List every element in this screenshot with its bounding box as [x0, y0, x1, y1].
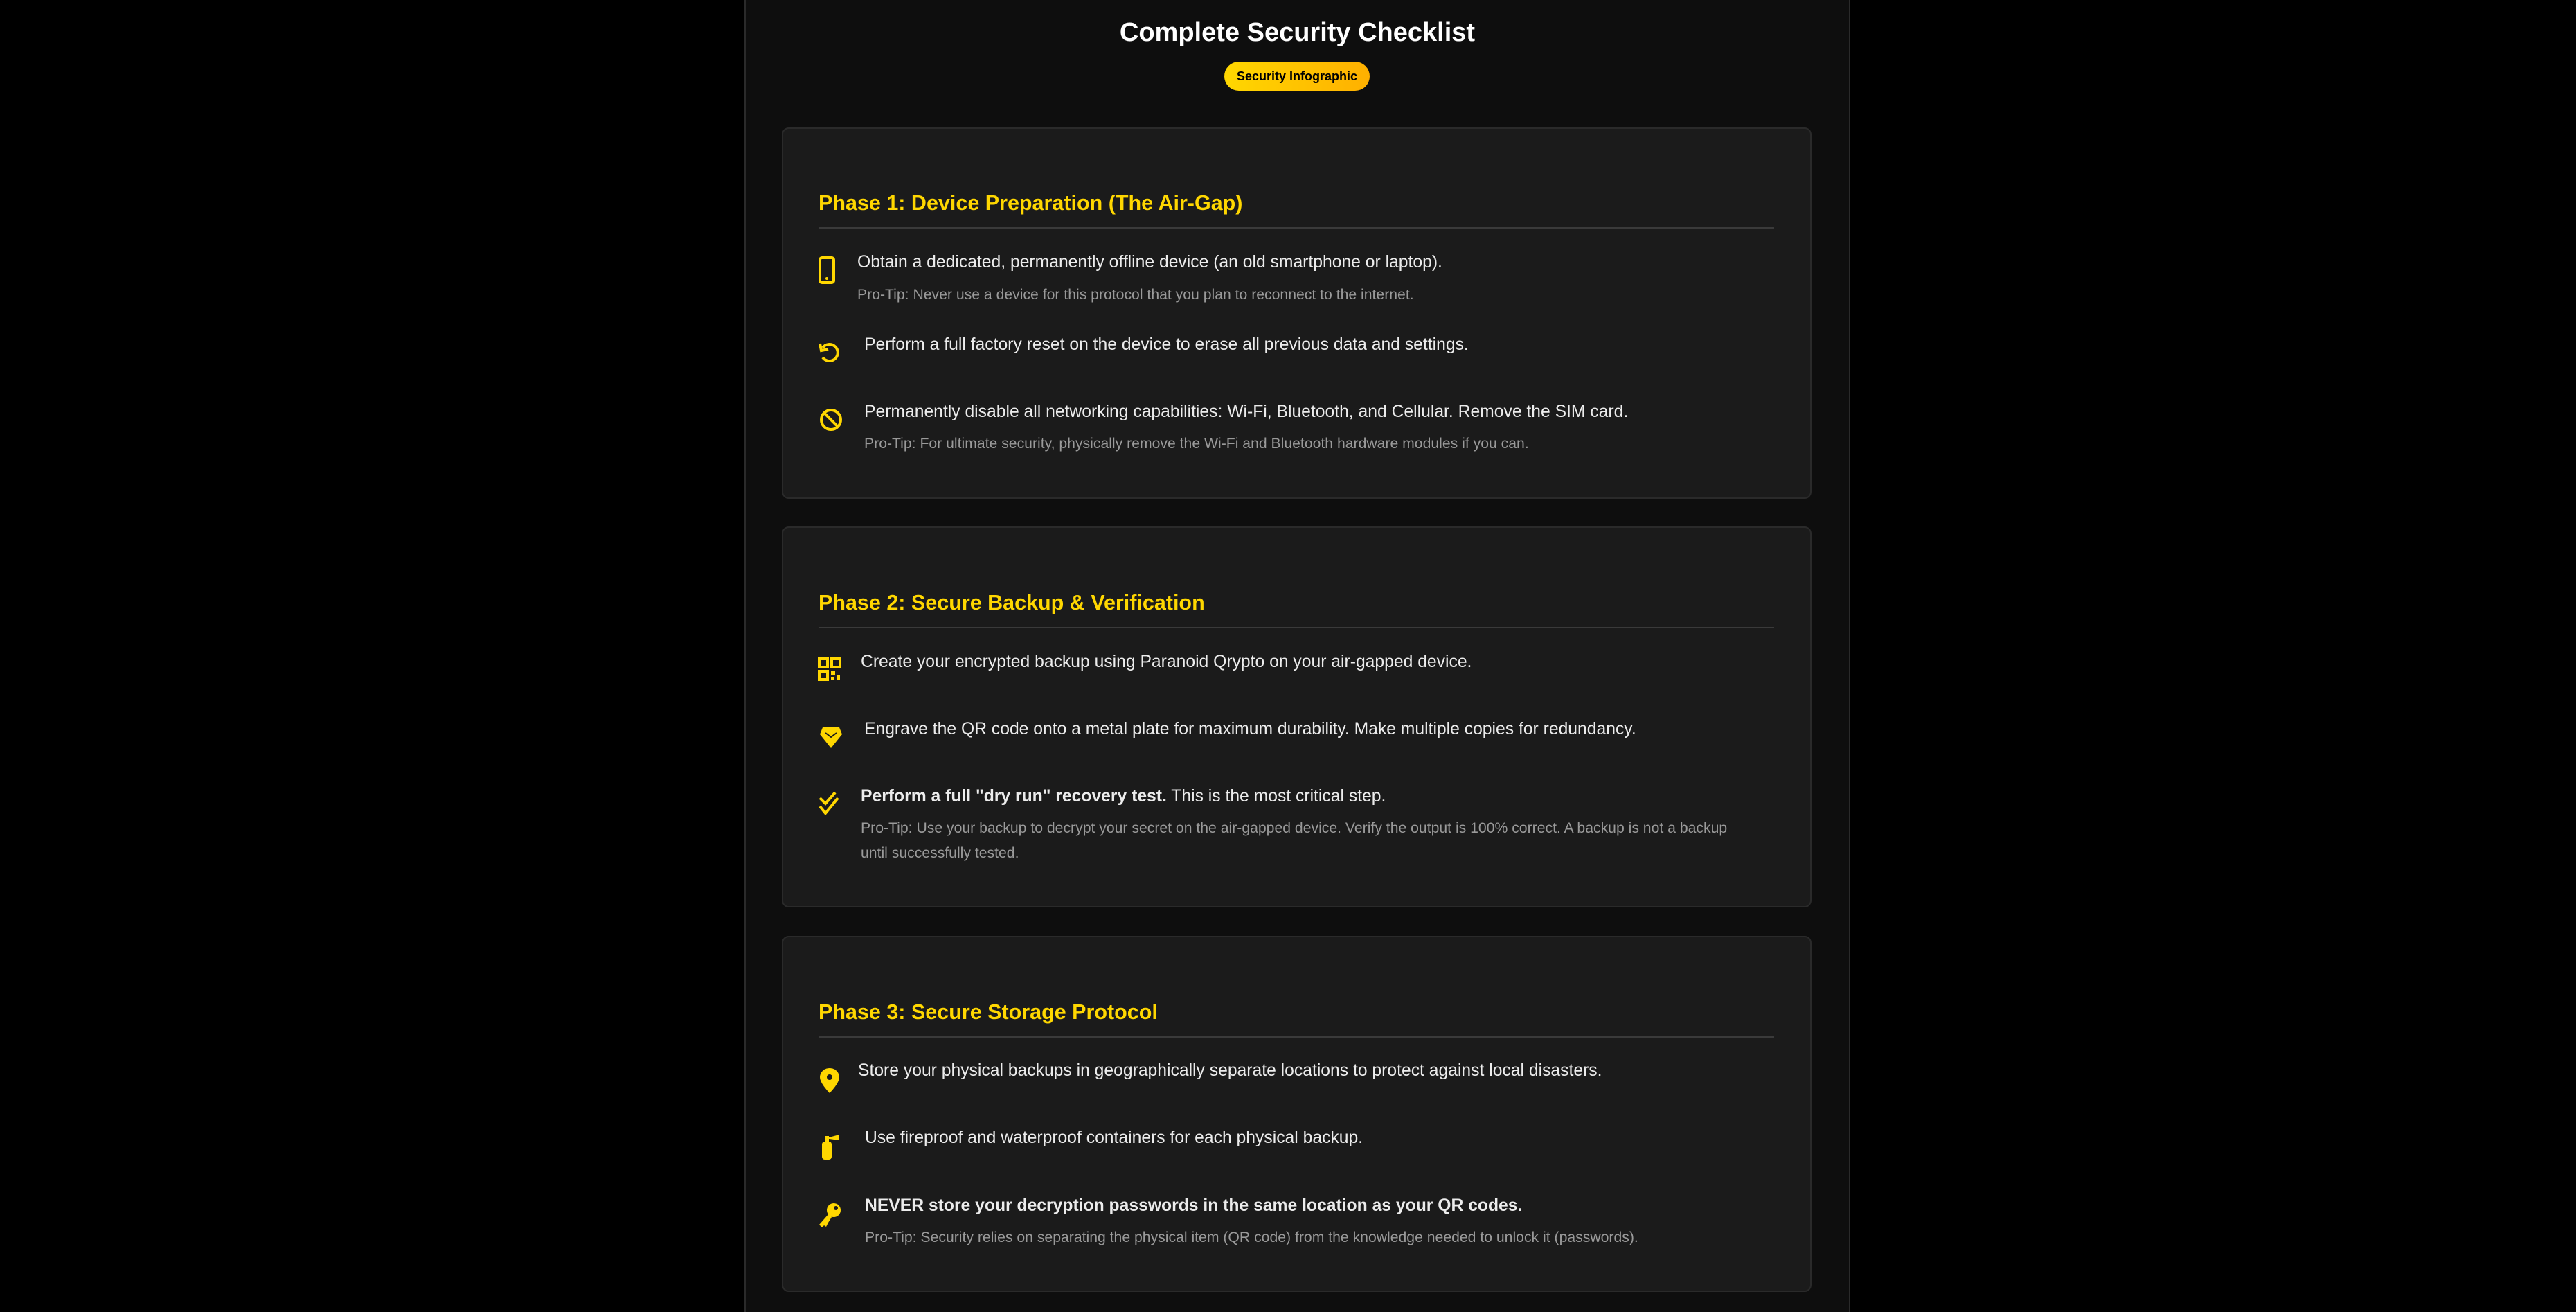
badge: Security Infographic: [1237, 69, 1357, 83]
icon: key: [819, 1203, 841, 1227]
protip 9: Pro-Tip: Security relies on separating the physical item (QR code) from the knowledge needed to unlock it (passwords).: [865, 1230, 1638, 1245]
icon: block: [820, 409, 842, 431]
text: item 4: Create your encrypted backup using Paranoid Qrypto on your air-gapped device.: [861, 653, 1472, 671]
text: item 3: Permanently disable all networking capabilities: Wi-Fi, Bluetooth, and Cellular. Remove the SIM card.: [864, 402, 1628, 421]
icon: pin: [820, 1068, 839, 1093]
icon: phone: [819, 256, 835, 284]
text: item 8: Use fireproof and waterproof containers for each physical backup.: [865, 1128, 1363, 1147]
heading: phase 1: Phase 1: Device Preparation (The Air-Gap): [819, 191, 1242, 215]
text: item 6: Perform a full "dry run" recovery test. This is the most critical step.: [861, 787, 1386, 806]
text: item 1: Obtain a dedicated, permanently offline device (an old smartphone or laptop).: [857, 253, 1442, 272]
icon: reset: [819, 343, 839, 362]
protip 6: Pro-Tip: Use your backup to decrypt your secret on the air-gapped device. Verify the output is 100% correct. A backup is not a backup until successfully tested.: [861, 820, 1727, 861]
panel: phase 1: [782, 127, 1812, 499]
icon: qr: [818, 657, 841, 681]
panel: phase 3: [782, 936, 1812, 1292]
text: item 9: NEVER store your decryption passwords in the same location as your QR codes.: [865, 1196, 1522, 1215]
text: item 2: Perform a full factory reset on the device to erase all previous data and settings.: [864, 335, 1469, 354]
protip 1: Pro-Tip: Never use a device for this protocol that you plan to reconnect to the internet.: [857, 287, 1414, 303]
icon: extinguisher: [822, 1135, 839, 1160]
text: item 7: Store your physical backups in geographically separate locations to protect against local disasters.: [858, 1061, 1602, 1080]
icon: gem: [820, 727, 842, 748]
heading: phase 2: Phase 2: Secure Backup & Verification: [819, 591, 1205, 614]
panel: phase 2: [782, 526, 1812, 907]
protip 3: Pro-Tip: For ultimate security, physically remove the Wi-Fi and Bluetooth hardware modules if you can.: [864, 436, 1529, 452]
icon: double check: [819, 791, 839, 815]
badge: [1224, 62, 1370, 91]
heading: phase 3: Phase 3: Secure Storage Protocol: [819, 1000, 1158, 1024]
title: Complete Security Checklist: [1120, 18, 1475, 47]
text: item 5: Engrave the QR code onto a metal plate for maximum durability. Make multiple copies for redundancy.: [864, 720, 1636, 738]
